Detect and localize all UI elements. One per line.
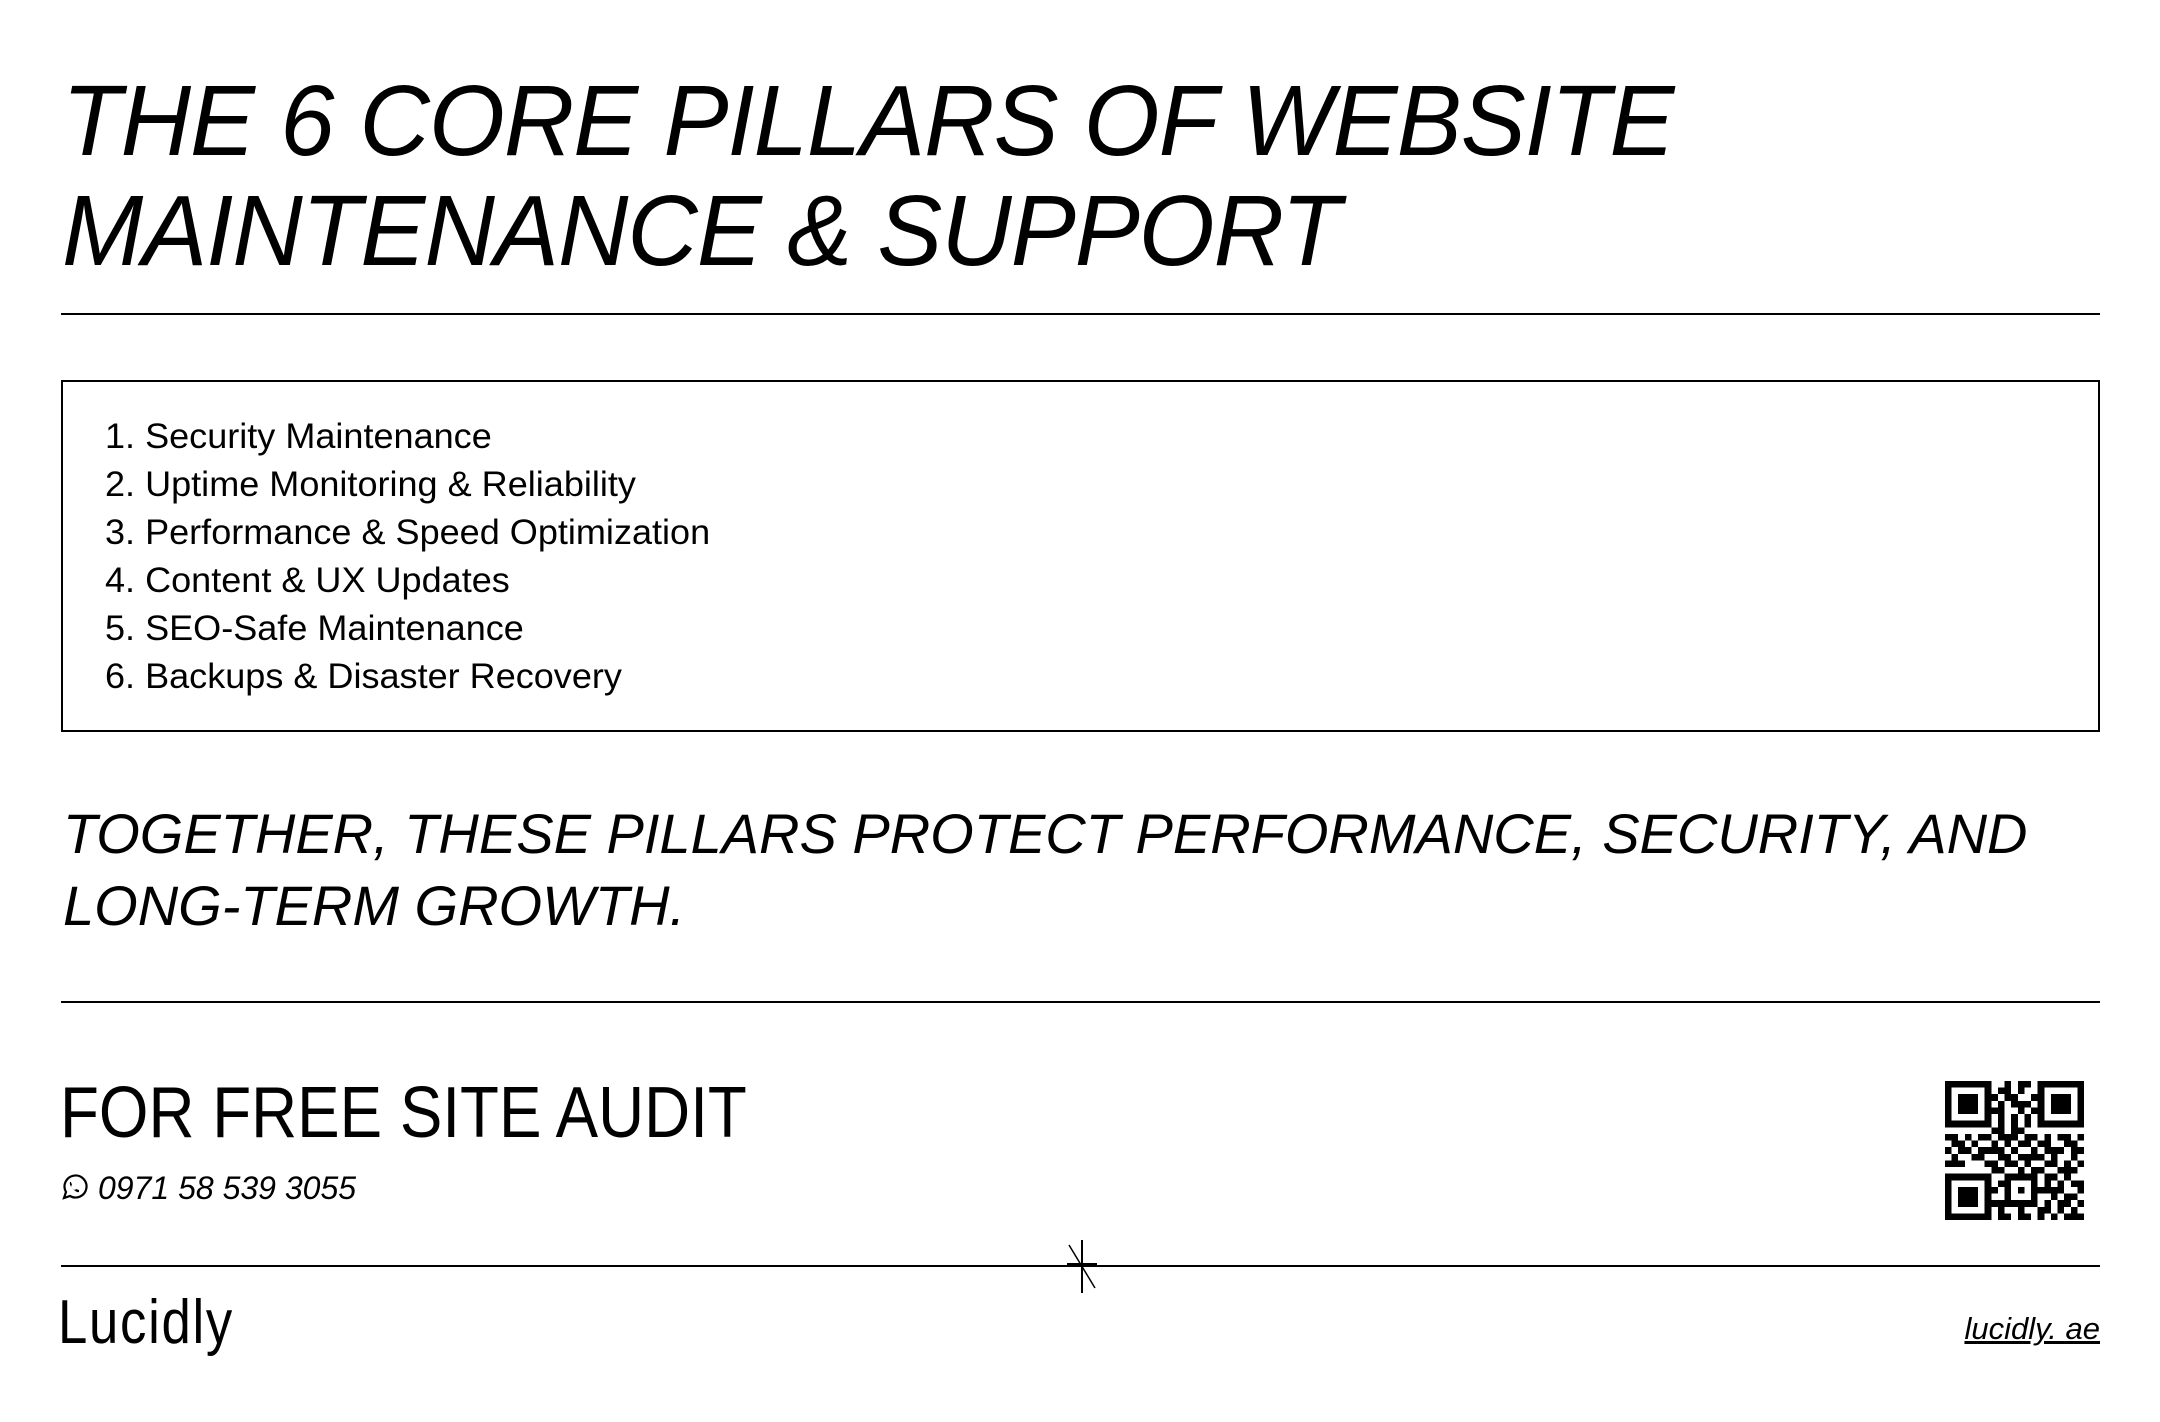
title	[62, 65, 1676, 287]
text: 0971 58 539 3055	[98, 1170, 356, 1206]
QR code	[1945, 1081, 2084, 1220]
phone contact	[62, 1170, 356, 1206]
title: MAINTENANCE & SUPPORT	[62, 175, 1340, 287]
panel: pillar list	[61, 380, 2100, 732]
tagline: LONG-TERM GROWTH.	[63, 874, 685, 937]
icon: whatsapp	[62, 1174, 88, 1200]
list of pillars: 4. Content & UX Updates	[105, 561, 510, 600]
tagline: TOGETHER, THESE PILLARS PROTECT PERFORMANCE, SECURITY, AND	[63, 802, 2027, 865]
list of pillars: 6. Backups & Disaster Recovery	[105, 657, 622, 696]
website link: lucidly. ae	[1964, 1311, 2100, 1346]
list of pillars	[105, 417, 710, 696]
CTA heading: FOR FREE SITE AUDIT	[60, 1073, 747, 1153]
list of pillars: 5. SEO-Safe Maintenance	[105, 609, 524, 648]
icon: sparkle cross	[1067, 1240, 1097, 1293]
title: THE 6 CORE PILLARS OF WEBSITE	[62, 65, 1674, 177]
list of pillars: 3. Performance & Speed Optimization	[105, 513, 710, 552]
logo: Lucidly: Lucidly	[58, 1288, 234, 1357]
list of pillars: 1. Security Maintenance	[105, 417, 492, 456]
tagline	[63, 802, 2027, 937]
list of pillars: 2. Uptime Monitoring & Reliability	[105, 465, 636, 504]
